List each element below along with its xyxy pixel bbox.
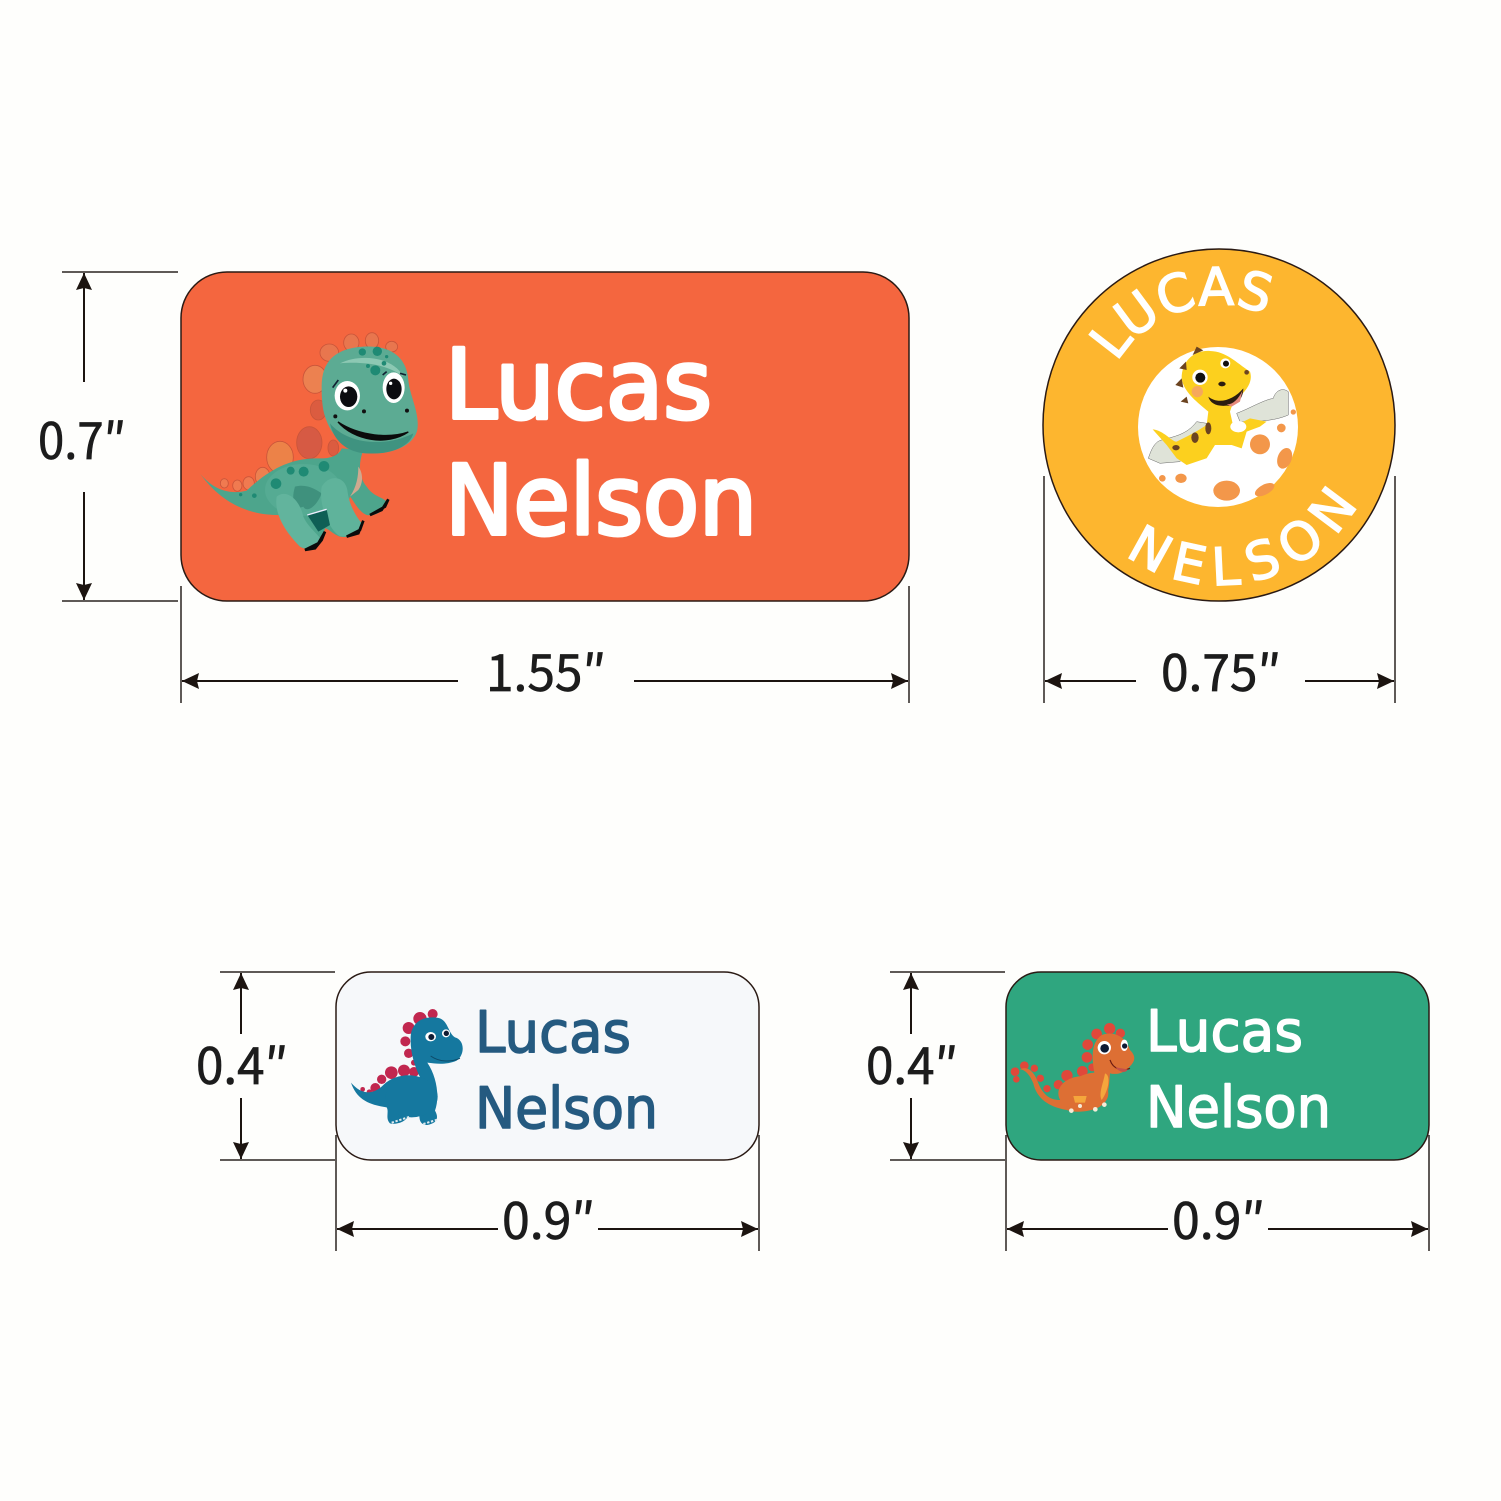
dimension: height 0.7 in: 0.7″ xyxy=(38,402,126,474)
text: Lucas Nelson blue xyxy=(475,1000,658,1142)
dimension: width 0.9 in (white label) xyxy=(336,1135,759,1254)
text: NELSON curved: NELSON xyxy=(1128,486,1357,586)
dimension: width 1.55 in xyxy=(181,586,909,706)
label: small white rectangle xyxy=(336,972,759,1160)
dimension: width 0.9 in (green label): 0.9″ xyxy=(1172,1182,1265,1254)
dimension: height 0.4 in (white label): 0.4″ xyxy=(196,1027,288,1099)
text: Lucas Nelson: Lucas xyxy=(445,329,712,441)
label: large orange rectangle xyxy=(181,272,909,601)
label: round yellow sticker xyxy=(1042,248,1396,602)
dimension: height 0.4 in (green label) xyxy=(866,972,1005,1160)
dimension: height 0.4 in (white label) xyxy=(196,972,335,1160)
text: Lucas Nelson xyxy=(445,329,757,557)
dimension: height 0.7 in xyxy=(38,272,178,601)
text: Lucas Nelson blue: Nelson xyxy=(475,1076,658,1142)
icon: yellow dinosaur hatching from egg xyxy=(1148,347,1296,501)
text: Lucas Nelson: Nelson xyxy=(445,445,757,557)
text: Lucas Nelson white: Lucas xyxy=(1146,999,1303,1065)
dimension: width 0.9 in (green label) xyxy=(1006,1135,1429,1254)
text: Lucas Nelson blue: Lucas xyxy=(475,1000,631,1066)
icon: orange dinosaur xyxy=(1011,1023,1134,1113)
icon: blue dinosaur xyxy=(351,1009,463,1125)
text: Lucas Nelson white xyxy=(1146,999,1331,1141)
dimension: diameter 0.75 in: 0.75″ xyxy=(1161,634,1281,706)
icon: green dinosaur xyxy=(199,333,418,550)
dimension: width 0.9 in (white label): 0.9″ xyxy=(502,1182,595,1254)
dimension: height 0.4 in (green label): 0.4″ xyxy=(866,1027,958,1099)
dimension: width 1.55 in: 1.55″ xyxy=(486,634,606,706)
text: Lucas Nelson white: Nelson xyxy=(1146,1075,1331,1141)
label: small green rectangle xyxy=(1006,972,1429,1160)
text: LUCAS curved: LUCAS xyxy=(1088,266,1272,359)
dimension: diameter 0.75 in xyxy=(1044,476,1395,706)
